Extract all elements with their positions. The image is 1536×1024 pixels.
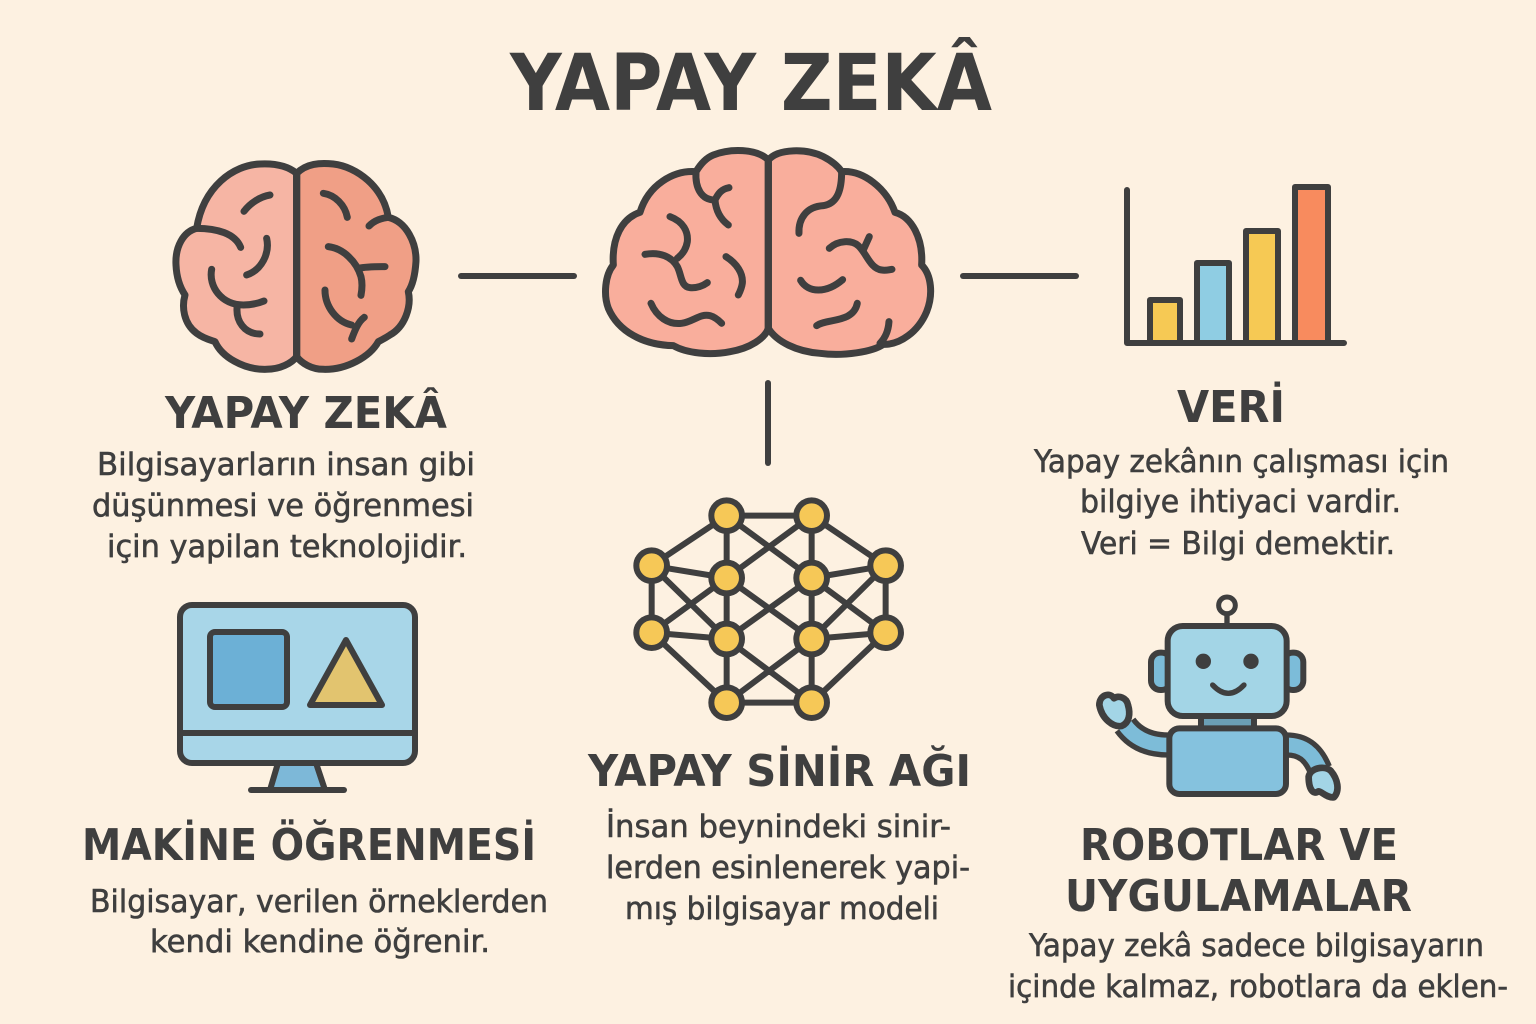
panel: veri xyxy=(1033,187,1449,562)
title: YAPAY ZEKÂ xyxy=(509,37,992,129)
icon: robot xyxy=(1099,597,1338,797)
heading: robotlar ve uygulamalar xyxy=(1065,820,1412,922)
text: yapay sinir agi description: mış bilgisayar modeli xyxy=(625,891,939,927)
heading: robotlar ve uygulamalar: ROBOTLAR VE xyxy=(1080,820,1398,871)
heading: yapay zeka: YAPAY ZEKÂ xyxy=(164,386,447,439)
connector: brain to left panel xyxy=(461,273,574,279)
panel: yapay sinir agi xyxy=(587,500,971,927)
panel: yapay zeka xyxy=(92,163,475,565)
text: yapay sinir agi description xyxy=(606,809,970,927)
panel: robotlar xyxy=(1008,597,1508,1005)
text: robotlar description: Yapay zekâ sadece bilgisayarın xyxy=(1028,928,1484,964)
text: robotlar description xyxy=(1008,928,1508,1005)
icon: left brain xyxy=(176,163,416,369)
text: yapay zeka description: Bilgisayarların insan gibi xyxy=(97,447,475,483)
text: veri description: Veri = Bilgi demektir. xyxy=(1081,526,1395,562)
text: yapay zeka description: için yapilan teknolojidir. xyxy=(107,529,467,565)
heading: veri: VERİ xyxy=(1177,380,1285,433)
connector: brain to data panel xyxy=(963,273,1076,279)
text: yapay zeka description xyxy=(92,447,475,565)
text: robotlar description: içinde kalmaz, robotlara da eklen- xyxy=(1008,969,1508,1005)
icon: neural network xyxy=(636,500,901,718)
text: makine ogrenmesi description xyxy=(90,884,548,960)
text: veri description xyxy=(1033,444,1449,562)
text: veri description: bilgiye ihtiyaci vardir. xyxy=(1080,484,1401,520)
icon: monitor xyxy=(180,605,415,790)
panel: makine ogrenmesi xyxy=(82,605,548,960)
heading: makine ogrenmesi: MAKİNE ÖĞRENMESİ xyxy=(82,818,536,871)
text: yapay sinir agi description: İnsan beynindeki sinir- xyxy=(606,809,951,845)
text: veri description: Yapay zekânın çalışması için xyxy=(1033,444,1449,480)
heading: robotlar ve uygulamalar: UYGULAMALAR xyxy=(1065,871,1412,922)
text: makine ogrenmesi description: Bilgisayar, verilen örneklerden xyxy=(90,884,548,920)
heading: yapay sinir agi: YAPAY SİNİR AĞI xyxy=(587,744,971,797)
text: yapay zeka description: düşünmesi ve öğrenmesi xyxy=(92,488,474,524)
icon: bar chart xyxy=(1127,187,1344,343)
text: yapay sinir agi description: lerden esinlenerek yapi- xyxy=(606,850,970,886)
text: makine ogrenmesi description: kendi kendine öğrenir. xyxy=(150,924,490,960)
connector: brain to neural network xyxy=(765,383,771,463)
icon: central brain xyxy=(606,150,931,354)
